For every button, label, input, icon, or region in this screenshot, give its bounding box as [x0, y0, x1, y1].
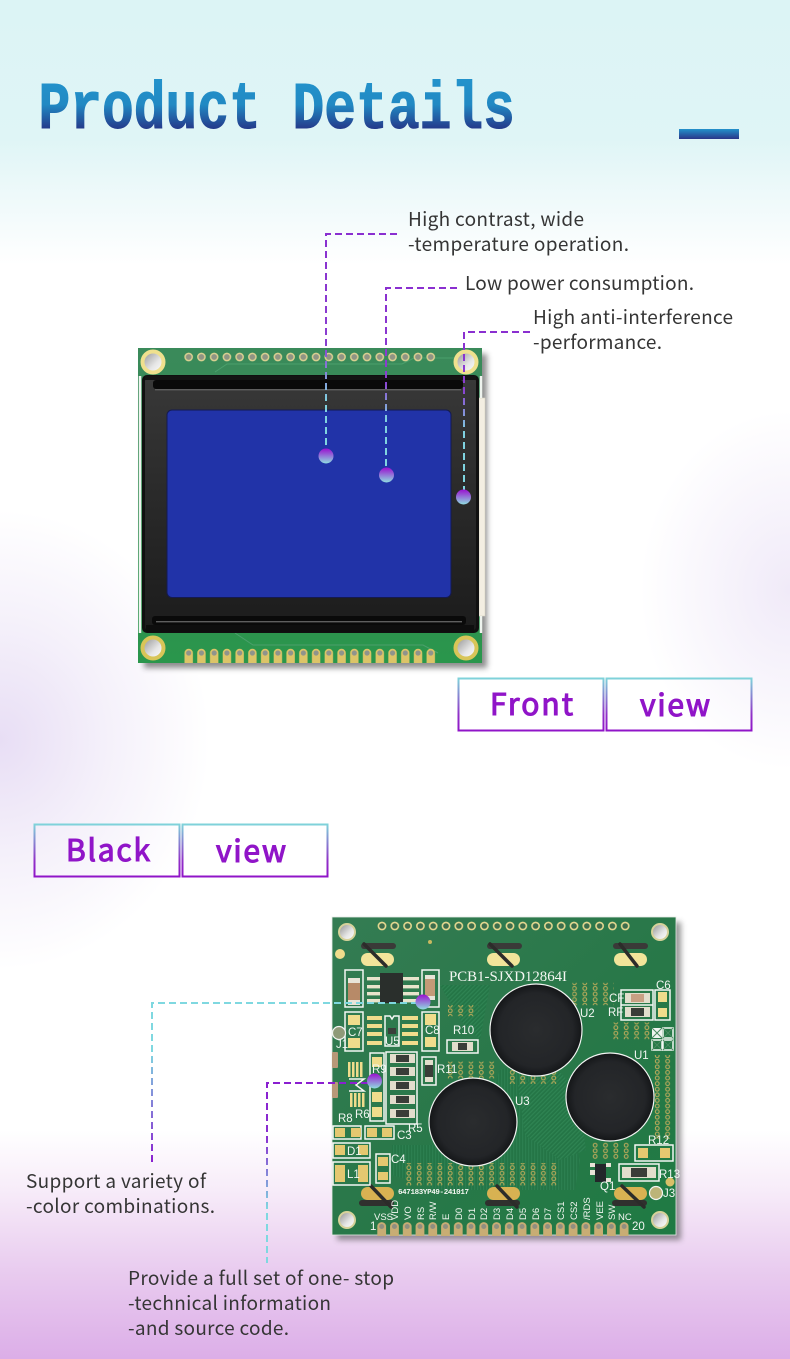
label: Black view: Black [66, 826, 150, 870]
front gold pins row [182, 648, 437, 663]
callout text: contrast [408, 205, 629, 257]
resistor column [386, 1040, 478, 1124]
silkscreen labels: R13 [659, 1169, 680, 1181]
silkscreen labels: SW [607, 1205, 618, 1220]
blue LCD screen [167, 410, 451, 598]
silkscreen labels: 1 [370, 1221, 376, 1233]
top bezel channel [145, 376, 476, 390]
white edge of module [140, 376, 481, 633]
front view LCD module [138, 348, 487, 668]
mounting holes [339, 924, 668, 1228]
callout line 5 [267, 1074, 382, 1263]
silkscreen labels: U1 [634, 1050, 649, 1062]
silkscreen labels: D1 [467, 1208, 478, 1220]
silkscreen labels: D1 [347, 1146, 362, 1158]
white side connector tab [479, 398, 485, 616]
silkscreen labels: VSS [374, 1212, 393, 1223]
bottom pins [375, 1222, 630, 1236]
silkscreen labels: C3 [397, 1130, 412, 1142]
silkscreen labels: D4 [505, 1208, 516, 1220]
silkscreen labels: U3 [515, 1096, 530, 1108]
label: Black view [34, 824, 328, 876]
callout text: technical information [128, 1264, 394, 1341]
silkscreen labels: U2 [580, 1008, 595, 1020]
silkscreen labels: R12 [648, 1135, 669, 1147]
callout text: technical information: -technical information [128, 1289, 331, 1316]
silkscreen labels: VO [403, 1206, 414, 1220]
silkscreen labels: /RDS [582, 1197, 593, 1220]
silkscreen labels [336, 969, 680, 1233]
back view PCB [332, 917, 681, 1240]
silkscreen labels: R8 [338, 1113, 353, 1125]
silkscreen labels: J1 [336, 1039, 348, 1051]
callout text: anti-interference: -performance. [533, 328, 662, 355]
silkscreen labels: 647183YP49-241017 [398, 1189, 469, 1197]
epoxy chip blobs [429, 984, 654, 1166]
silkscreen labels: C8 [425, 1025, 440, 1037]
silkscreen labels: PCB1-SJXD12864I [449, 969, 567, 985]
silkscreen labels: C4 [391, 1154, 406, 1166]
callout text: contrast: -temperature operation. [408, 230, 629, 257]
callout line 1 [318, 234, 397, 464]
callout text: low power: Low power consumption. [465, 269, 694, 296]
silkscreen labels: D6 [531, 1208, 542, 1220]
back PCB board [332, 917, 676, 1235]
silkscreen labels: 20 [632, 1221, 645, 1233]
front PCB board [138, 348, 482, 663]
top pin holes [376, 919, 632, 933]
silkscreen labels: NC [618, 1212, 632, 1223]
callout line 2 [379, 288, 457, 482]
right components [335, 940, 674, 1200]
callout text: anti-interference: High anti-interference [533, 303, 733, 330]
silkscreen labels: C6 [656, 980, 671, 992]
title accent bar [679, 129, 739, 139]
top solder tabs [361, 943, 648, 966]
silkscreen labels: J3 [663, 1188, 675, 1200]
silkscreen labels: D2 [479, 1208, 490, 1220]
silkscreen labels: D7 [543, 1208, 554, 1220]
callout text: contrast: High contrast, wide [408, 205, 584, 232]
silkscreen labels: CS1 [556, 1202, 567, 1220]
IC and capacitors [345, 970, 439, 1007]
callout text: color combinations [26, 1167, 215, 1219]
callout text: anti-interference [533, 303, 733, 355]
silkscreen labels: Q1 [600, 1181, 615, 1193]
silkscreen labels: D5 [518, 1208, 529, 1220]
callout text: technical information: Provide a full set of one- stop [128, 1264, 394, 1291]
label: Front view [458, 678, 752, 730]
label: Front view: view [640, 681, 710, 725]
front pin holes row [182, 350, 437, 364]
silkscreen labels: VEE [595, 1201, 606, 1220]
silkscreen labels: R11 [437, 1064, 457, 1076]
silkscreen labels: D0 [454, 1208, 465, 1220]
C7 C8 U5 pads [332, 1012, 439, 1051]
callout line 3 [456, 332, 530, 504]
silkscreen labels: R5 [408, 1123, 423, 1135]
silkscreen labels: VDD [390, 1200, 401, 1220]
bottom solder tabs [359, 1186, 647, 1207]
silkscreen labels: R9 [372, 1064, 387, 1076]
callout text: color combinations: Support a variety of [26, 1167, 207, 1194]
via columns [404, 983, 673, 1185]
silkscreen labels: L1 [347, 1169, 360, 1181]
callout line 4 [152, 994, 430, 1162]
silkscreen labels: E [441, 1214, 452, 1220]
bottom bezel channel [146, 616, 474, 632]
silkscreen labels: U5 [385, 1036, 400, 1048]
silkscreen labels: CS2 [569, 1202, 580, 1220]
silkscreen labels: R10 [453, 1025, 474, 1037]
title: Product Details: Product Details [38, 74, 515, 149]
silkscreen labels: C7 [348, 1027, 363, 1039]
label: Black view: view [216, 827, 286, 871]
silkscreen labels: RS [416, 1207, 427, 1220]
silkscreen labels: R/W [428, 1202, 439, 1220]
silkscreen labels: D3 [492, 1208, 503, 1220]
label: Front view: Front [490, 680, 573, 724]
hatched trace areas [392, 1060, 580, 1190]
silkscreen labels: RF [608, 1007, 623, 1019]
black LCD bezel [142, 375, 479, 633]
callout text: color combinations: -color combinations. [26, 1192, 215, 1219]
callout text: technical information: -and source code. [128, 1314, 289, 1341]
mounting holes [142, 352, 476, 658]
silkscreen labels: CF [609, 993, 624, 1005]
left pads and connector [332, 1052, 394, 1185]
silkscreen labels: R6 [355, 1109, 370, 1121]
